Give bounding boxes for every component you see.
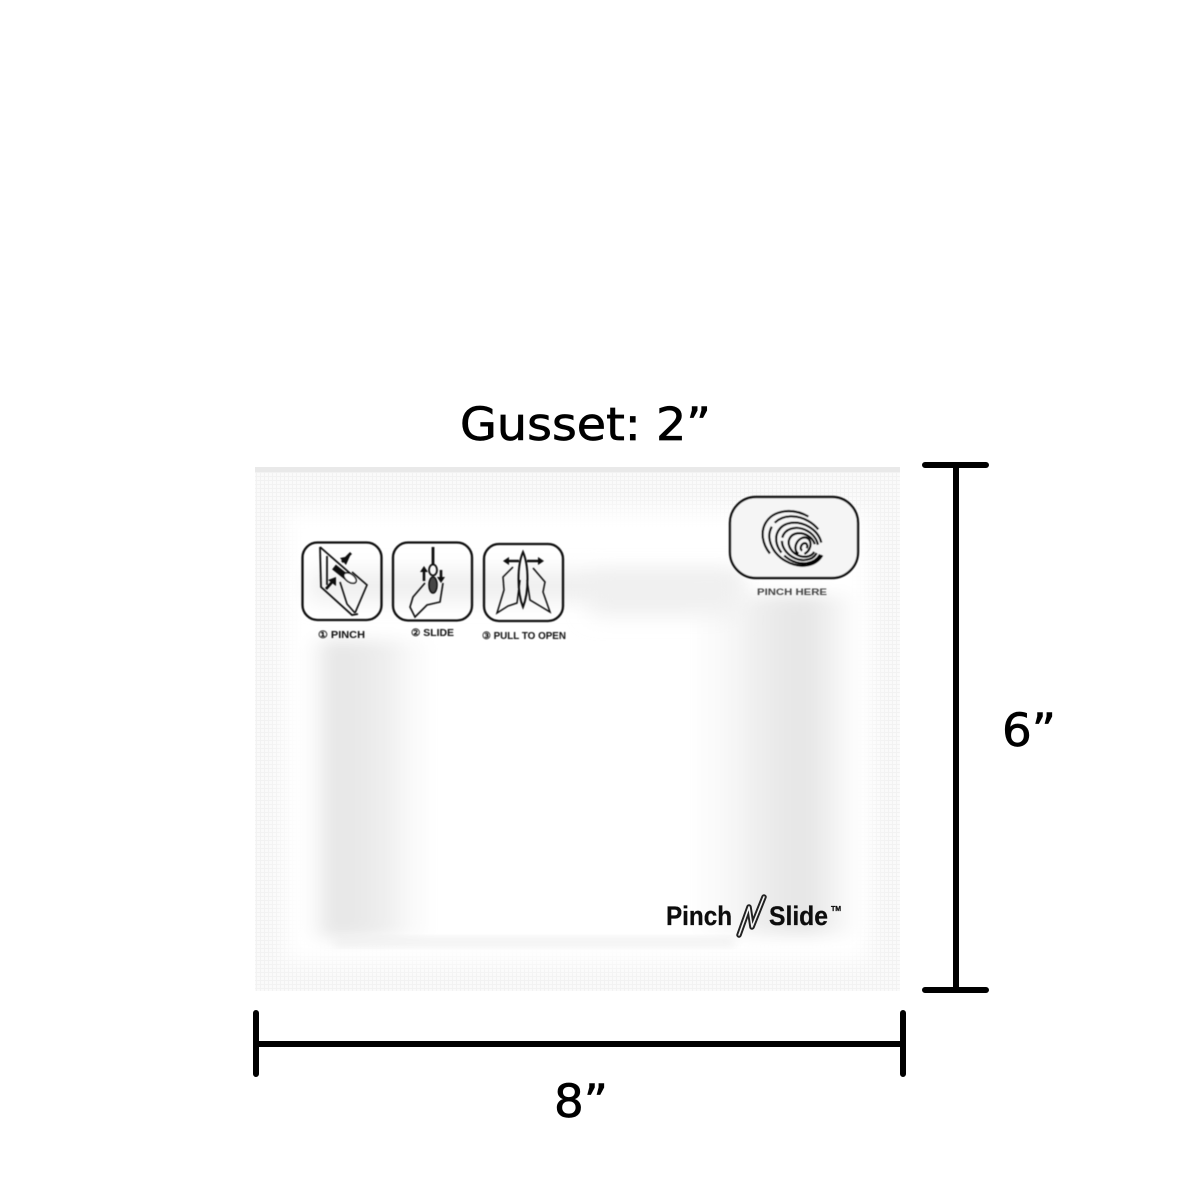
label: 8 inch: 8”: [554, 1075, 608, 1128]
logo mark: N: [739, 897, 764, 935]
pouch top edge: [255, 467, 900, 472]
icon: slide: [393, 542, 472, 620]
dimension: width: [256, 1013, 903, 1074]
label: pull to open: ③ PULL TO OPEN: [482, 631, 566, 642]
label: 6 inch: 6”: [1002, 704, 1056, 757]
icon row: instructions: [302, 542, 563, 621]
shading: right band: [732, 592, 842, 938]
label: pinch here: PINCH HERE: [757, 587, 827, 598]
label: pinch: ① PINCH: [318, 630, 365, 641]
fingerprint: [752, 500, 838, 580]
pouch seal border: [255, 472, 900, 991]
instruction labels: [318, 628, 566, 642]
icon: pinch: [302, 542, 382, 620]
logo: pinch n slide: [666, 897, 841, 935]
shading: left band: [316, 638, 405, 940]
icon: pull to open: [484, 544, 563, 621]
icon: fingerprint pinch area: [730, 497, 858, 580]
pinch area outline: [730, 497, 858, 578]
logo trademark: TM: [831, 904, 841, 913]
heading: gusset: Gusset: 2”: [460, 398, 711, 451]
dimension: height: [925, 465, 986, 990]
shading: upper right wash: [609, 598, 721, 612]
shading: top band: [312, 571, 594, 601]
logo text: slide: Slide: [769, 901, 828, 931]
pouch inner area: [285, 510, 869, 962]
label: slide: ② SLIDE: [411, 628, 454, 639]
pouch shading: [304, 572, 860, 946]
logo text: pinch: Pinch: [666, 901, 732, 931]
panel: pouch: [255, 467, 900, 991]
shading: bottom band: [402, 938, 729, 946]
